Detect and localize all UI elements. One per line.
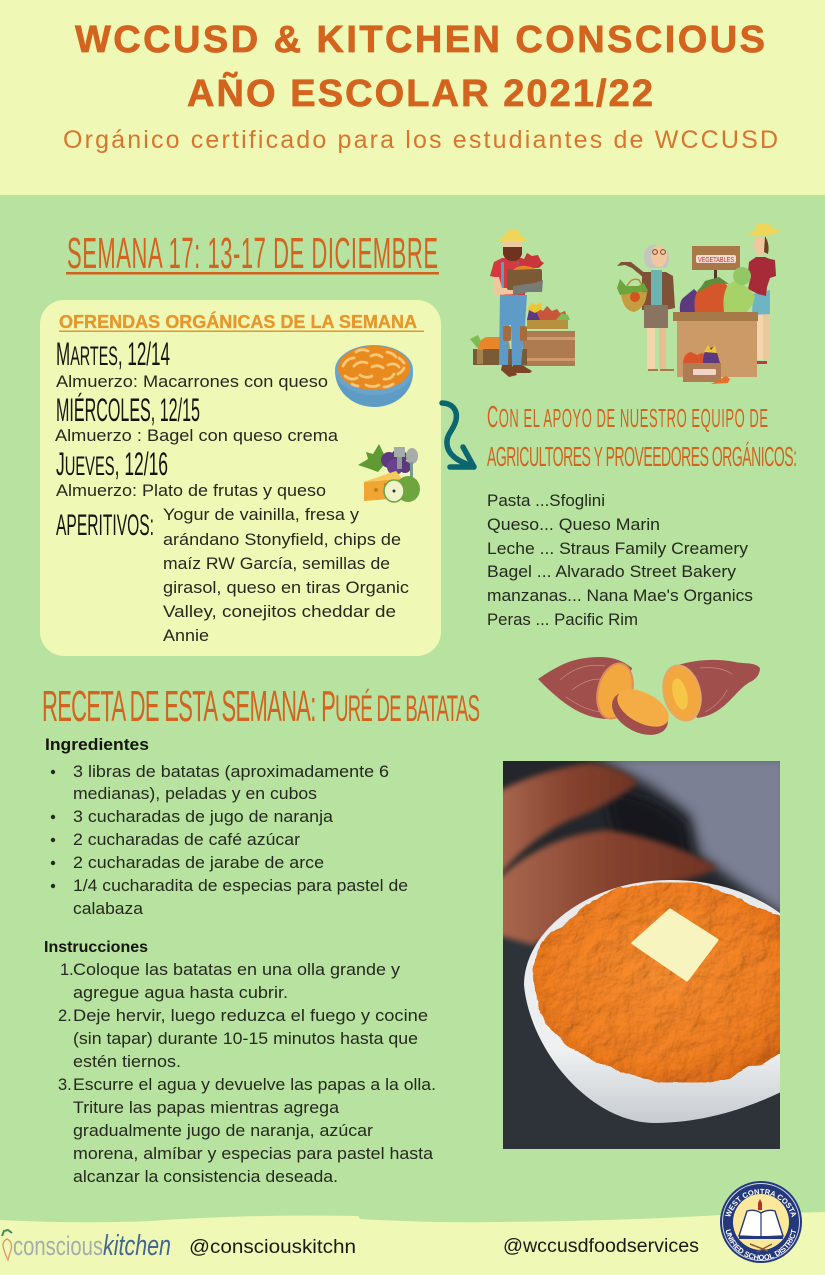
subtitle: Orgánico certificado para los estudiantes de WCCUSD — [63, 126, 778, 154]
title: AÑO ESCOLAR 2021/22 — [187, 71, 653, 115]
snacks: Valley, conejitos cheddar de — [163, 603, 396, 621]
suppliers list: Pasta ...Sfoglini — [487, 492, 605, 510]
instructions: gradualmente jugo de naranja, azúcar — [73, 1122, 374, 1140]
logo: conscious kitchen: kitchen — [103, 1230, 171, 1262]
instructions: alcanzar la consistencia deseada. — [73, 1168, 338, 1186]
snacks: Annie — [163, 627, 209, 645]
Thursday menu: JUEVES, 12/16 — [56, 446, 168, 482]
Wednesday menu: Almuerzo : Bagel con queso crema — [55, 427, 339, 445]
photo: mashed sweet potatoes — [503, 761, 780, 1149]
table — [677, 318, 757, 377]
header band — [0, 0, 825, 195]
icon: macaroni bowl — [335, 345, 413, 407]
Tuesday menu: MARTES, 12/14 — [56, 336, 170, 372]
arrow — [442, 403, 474, 467]
ingredients: Ingredientes — [45, 736, 149, 754]
suppliers list: Peras ... Pacific Rim — [487, 611, 638, 629]
torso — [490, 258, 531, 295]
instructions: Coloque las batatas en una olla grande y — [73, 961, 401, 979]
suppliers list — [487, 492, 753, 629]
instructions: Escurre el agua y devuelve las papas a la olla. — [73, 1076, 436, 1094]
Wednesday menu: MIÉRCOLES, 12/15 — [56, 392, 200, 428]
ingredients: 2 cucharadas de café azúcar — [73, 831, 301, 849]
ingredients — [45, 736, 408, 918]
ingredients: 3 cucharadas de jugo de naranja — [73, 808, 334, 826]
logo: conscious kitchen — [2, 1230, 171, 1262]
instructions — [44, 939, 436, 1186]
week heading: SEMANA 17: 13-17 DE DICIEMBRE — [67, 230, 438, 278]
suppliers list: Queso... Queso Marin — [487, 516, 660, 534]
Tuesday menu: Almuerzo: Macarrones con queso — [56, 373, 328, 391]
instructions: Instrucciones — [44, 939, 148, 956]
instructions: morena, almíbar y especias para pastel hasta — [73, 1145, 434, 1163]
produce on table — [680, 277, 755, 312]
instructions: Triture las papas mientras agrega — [73, 1099, 340, 1117]
icon: fruit and cheese plate — [358, 444, 420, 502]
suppliers list: Leche ... Straus Family Creamery — [487, 540, 749, 558]
Thursday menu: Almuerzo: Plato de frutas y queso — [56, 482, 326, 500]
suppliers list: Bagel ... Alvarado Street Bakery — [487, 563, 737, 581]
legs — [499, 295, 527, 365]
suppliers heading — [487, 400, 797, 472]
title — [75, 19, 765, 115]
panel heading: OFRENDAS ORGÁNICAS DE LA SEMANA — [59, 311, 417, 332]
vendor — [747, 223, 782, 364]
produce box — [507, 269, 542, 290]
sign — [692, 246, 740, 294]
Tuesday menu — [56, 336, 328, 391]
sign: VEGETABLES — [698, 257, 734, 264]
snacks: arándano Stonyfield, chips de — [163, 531, 401, 549]
Thursday menu — [56, 446, 326, 500]
panel: weekly organic offerings — [40, 300, 441, 656]
instructions: Deje hervir, luego reduzca el fuego y cocine — [73, 1007, 428, 1025]
snacks: APERITIVOS: — [56, 509, 154, 542]
illustration: customer and vendor at market stall — [617, 223, 782, 384]
title: WCCUSD & KITCHEN CONSCIOUS — [75, 19, 765, 61]
ingredients: calabaza — [73, 900, 144, 918]
suppliers heading: AGRICULTORES Y PROVEEDORES ORGÁNICOS: — [487, 441, 797, 472]
instructions: estén tiernos. — [73, 1053, 181, 1071]
recipe heading: RECETA DE ESTA SEMANA: PURÉ DE BATATAS — [42, 683, 480, 731]
illustration: farmer with crates — [470, 229, 575, 377]
produce crate — [683, 345, 730, 384]
ingredients: 3 libras de batatas (aproximadamente 6 — [73, 763, 389, 781]
head — [503, 238, 522, 250]
snacks: girasol, queso en tiras Organic — [163, 579, 409, 597]
suppliers list: manzanas... Nana Mae's Organics — [487, 587, 753, 605]
suppliers heading: CON EL APOYO DE NUESTRO EQUIPO DE — [487, 400, 768, 435]
low crate — [470, 335, 527, 365]
instructions: agregue agua hasta cubrir. — [73, 984, 288, 1002]
snacks: maíz RW García, semillas de — [163, 555, 390, 573]
snacks: Yogur de vainilla, fresa y — [163, 506, 360, 524]
badge: West Contra Costa Unified School District: UNIFIED SCHOOL DISTRICT — [726, 1229, 796, 1260]
icon: sweet potatoes — [538, 657, 760, 744]
ingredients: 1/4 cucharadita de especias para pastel de — [73, 877, 408, 895]
large crate — [523, 302, 575, 366]
ingredients: medianas), peladas y en cubos — [73, 785, 317, 803]
instructions: 2. — [58, 1007, 72, 1025]
footer wave — [0, 1212, 825, 1275]
instructions: 1. — [60, 961, 74, 979]
social handle: WCCUSD food services: @wccusdfoodservices — [503, 1236, 699, 1257]
badge: West Contra Costa Unified School District — [720, 1181, 802, 1263]
ingredients: 2 cucharadas de jarabe de arce — [73, 854, 324, 872]
instructions: (sin tapar) durante 10-15 minutos hasta que — [73, 1030, 418, 1048]
customer — [617, 245, 675, 371]
Wednesday menu — [55, 392, 339, 445]
snacks — [56, 506, 409, 645]
social handle: conscious kitchen: @consciouskitchn — [189, 1237, 356, 1258]
logo: conscious kitchen: conscious — [13, 1231, 103, 1261]
badge: West Contra Costa Unified School District: WEST CONTRA COSTA — [725, 1188, 796, 1218]
instructions: 3. — [58, 1076, 72, 1094]
